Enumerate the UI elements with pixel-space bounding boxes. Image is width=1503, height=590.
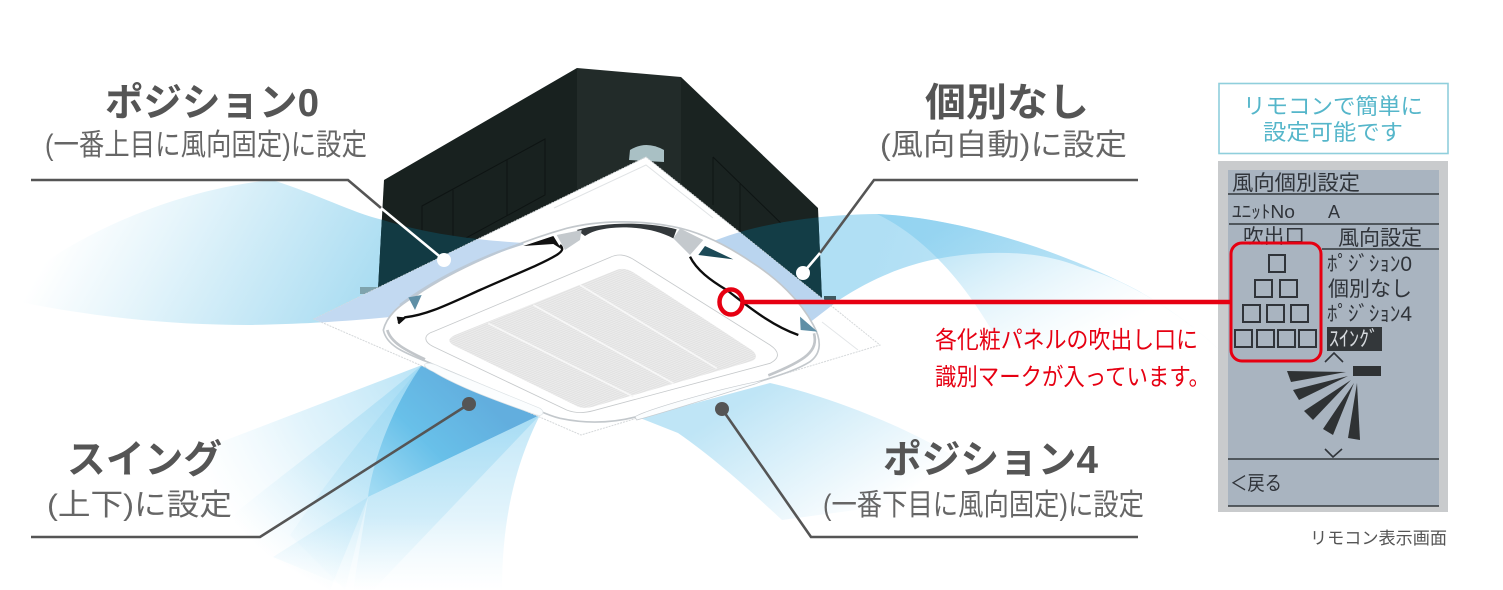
airflow: auto fan right [700,214,1222,353]
label: no individual setting: (風向自動)に設定 [880,129,1127,162]
label: position 0: ポジション0 [105,82,319,125]
unit face: ring, vanes and grille [383,222,819,422]
airflow: position 0 fan left [0,180,525,325]
LCD back label: ＜戻る [1230,473,1282,495]
leader: no individual setting [796,180,1138,280]
label: position 0 [45,82,367,162]
remote note box: 設定可能です [1263,120,1403,145]
label: position 4: ポジション4 [883,439,1098,482]
remote note box [1219,84,1448,154]
red pointer: mark circle to remote icons [720,243,1321,361]
label: no individual setting [880,82,1127,162]
lower vanes [425,363,765,420]
indoor unit: black casing [360,68,836,420]
LCD direction labels: ﾎﾟｼﾞｼｮﾝ4 [1327,303,1412,326]
remote LCD screen [1218,161,1448,512]
label: position 4 [823,439,1144,522]
remote note box: リモコンで簡単に [1243,94,1423,119]
air outlet slots [397,224,817,335]
LCD column headers: 吹出口 [1243,225,1305,248]
airflow: swing fan below unit [190,365,540,590]
LCD direction labels: ﾎﾟｼﾞｼｮﾝ0 [1327,253,1412,276]
label: position 4: (一番下目に風向固定)に設定 [823,489,1144,522]
label: swing [47,439,232,522]
LCD direction labels: 個別なし [1328,278,1412,301]
label: position 0: (一番上目に風向固定)に設定 [45,129,367,162]
callout: identification mark note: 識別マークが入っています。 [935,364,1210,391]
chrome ring corners [387,243,815,375]
grille [449,269,756,408]
leader: position 4 [715,402,1138,537]
LCD column headers [1243,225,1422,250]
caption: remote display: リモコン表示画面 [1310,529,1447,548]
LCD title: 風向個別設定 [1232,172,1360,195]
decoration ring [383,222,819,422]
airflow: position 4 fan lower right [640,383,1003,520]
leader: swing [31,397,476,537]
LCD outlet squares [1235,255,1316,347]
leader: position 0 [31,180,451,267]
callout: identification mark note [935,327,1210,391]
LCD direction labels: ｽｲﾝｸﾞ [1329,328,1379,351]
LCD unit row: A [1328,202,1340,222]
LCD column headers: 風向設定 [1338,227,1422,250]
centre intake panel [426,255,777,413]
airflow overlays on panel [314,232,832,322]
LCD direction labels [1327,253,1412,351]
LCD unit row: ﾕﾆｯﾄNo [1232,202,1295,222]
label: swing: (上下)に設定 [47,489,232,522]
LCD swing vanes [1287,353,1381,457]
label: no individual setting: 個別なし [925,82,1089,125]
LCD unit row [1232,202,1340,222]
callout: identification mark note: 各化粧パネルの吹出し口に [935,327,1198,354]
label: swing: スイング [67,439,222,482]
airflow overlays on casing [378,217,822,298]
ceiling panel [314,157,880,435]
